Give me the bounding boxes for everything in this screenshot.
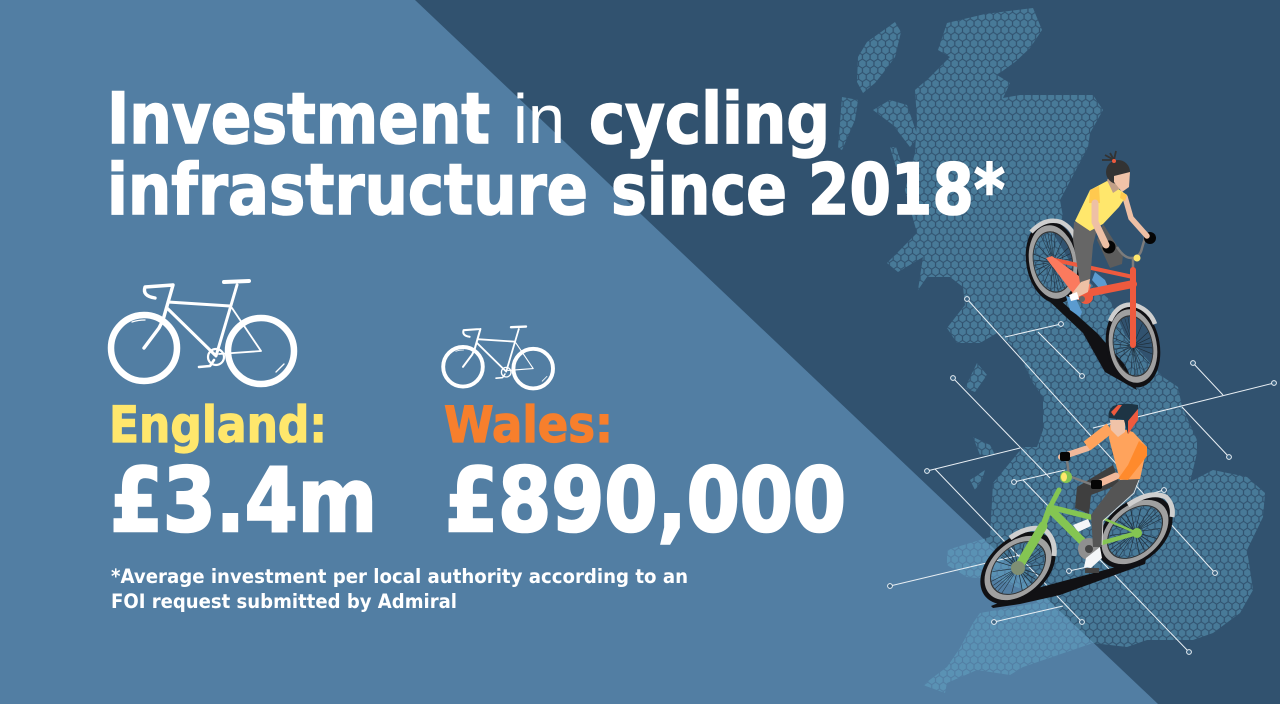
- far leg: [1075, 465, 1120, 514]
- near shoe: [1084, 547, 1102, 568]
- front wheel: [1102, 303, 1164, 389]
- near arm behind hand: [1061, 448, 1088, 457]
- forearm and glove: [1096, 476, 1116, 485]
- handlebar: [1117, 238, 1145, 275]
- chainring: [1078, 538, 1100, 560]
- far leg: [1097, 224, 1123, 268]
- icon: large bicycle (England): [111, 281, 294, 384]
- illustration: man on green bicycle: [969, 404, 1184, 616]
- Wales figure: £890,000: [445, 449, 846, 552]
- England figure: £3.4m: [110, 449, 377, 552]
- light and gloves: [1134, 254, 1140, 262]
- title: since: [611, 149, 787, 231]
- handlebar, light and gloves: [1067, 460, 1093, 485]
- background: dark diagonal panel: [415, 0, 1280, 704]
- title: [107, 78, 1005, 231]
- title: infrastructure: [107, 149, 588, 231]
- near leg: [1073, 222, 1098, 283]
- near leg: [1091, 479, 1139, 547]
- front wheel: [969, 520, 1067, 616]
- frame: [1018, 490, 1137, 568]
- rear wheel: [1086, 484, 1184, 580]
- fenders: [1010, 528, 1054, 556]
- shadow: [1030, 278, 1137, 390]
- neck and head: [1107, 172, 1122, 193]
- footnote: *Average investment per local authority according to an: [111, 565, 688, 588]
- title: in: [513, 80, 565, 158]
- frame: [1050, 259, 1133, 345]
- title: 2018*: [808, 149, 1005, 231]
- Wales label: Wales:: [444, 396, 613, 454]
- footnote: [111, 565, 688, 613]
- rear wheel: [1022, 219, 1084, 305]
- icon: small bicycle (Wales): [443, 327, 553, 388]
- head and helmet: [1110, 420, 1125, 437]
- footnote: FOI request submitted by Admiral: [111, 590, 457, 613]
- shirt: [1109, 425, 1147, 480]
- shirt: [1075, 181, 1127, 231]
- shadow: [991, 559, 1146, 608]
- arms: [1125, 197, 1147, 236]
- title: Investment: [107, 78, 490, 160]
- England label: England:: [109, 396, 327, 454]
- title: cycling: [589, 78, 830, 160]
- network lines with end nodes: [888, 297, 1276, 654]
- fenders: [1031, 221, 1076, 241]
- map: hexagon UK silhouette: [830, 0, 1280, 704]
- illustration: woman on red bicycle: [1022, 151, 1164, 390]
